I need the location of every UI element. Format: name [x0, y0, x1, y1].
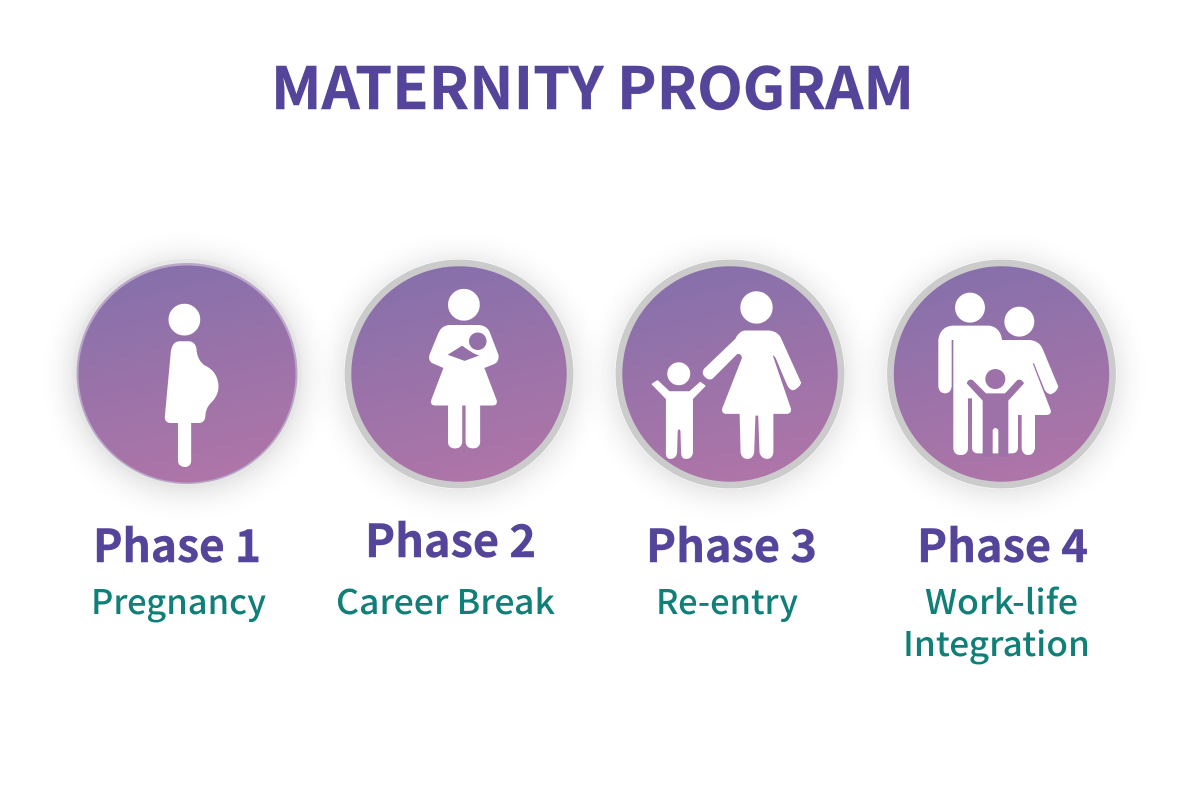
- heading: phase 1: Phase 1: [93, 510, 261, 575]
- heading: phase 2: Phase 2: [365, 505, 536, 570]
- icon: family of three: [938, 293, 1058, 457]
- heading: phase 3: Phase 3: [646, 510, 817, 575]
- panel: phase 3 re-entry: [615, 259, 845, 624]
- label: work-life integration: Integration: [903, 617, 1090, 666]
- label: work-life integration: [903, 575, 1090, 666]
- icon badge: phase 1 circle: [72, 259, 302, 490]
- heading: phase 4: Phase 4: [917, 510, 1088, 575]
- icon: mother and child holding hands: [652, 292, 800, 458]
- label: work-life integration: Work-life: [925, 575, 1078, 624]
- icon badge: phase 3 circle: [615, 259, 845, 491]
- label: re-entry: Re-entry: [656, 575, 799, 624]
- label: pregnancy: Pregnancy: [91, 575, 266, 624]
- icon: mother holding baby: [430, 290, 498, 448]
- panel: phase 2 career break: [336, 259, 574, 624]
- icon: pregnant woman: [165, 304, 218, 466]
- panel: phase 4 work-life integration: [886, 259, 1116, 666]
- panel: phase 1 pregnancy: [72, 259, 302, 624]
- icon badge: phase 4 circle: [886, 259, 1116, 491]
- label: career break: Career Break: [336, 575, 555, 624]
- icon badge: phase 2 circle: [344, 259, 574, 491]
- title: MATERNITY PROGRAM: [271, 42, 914, 126]
